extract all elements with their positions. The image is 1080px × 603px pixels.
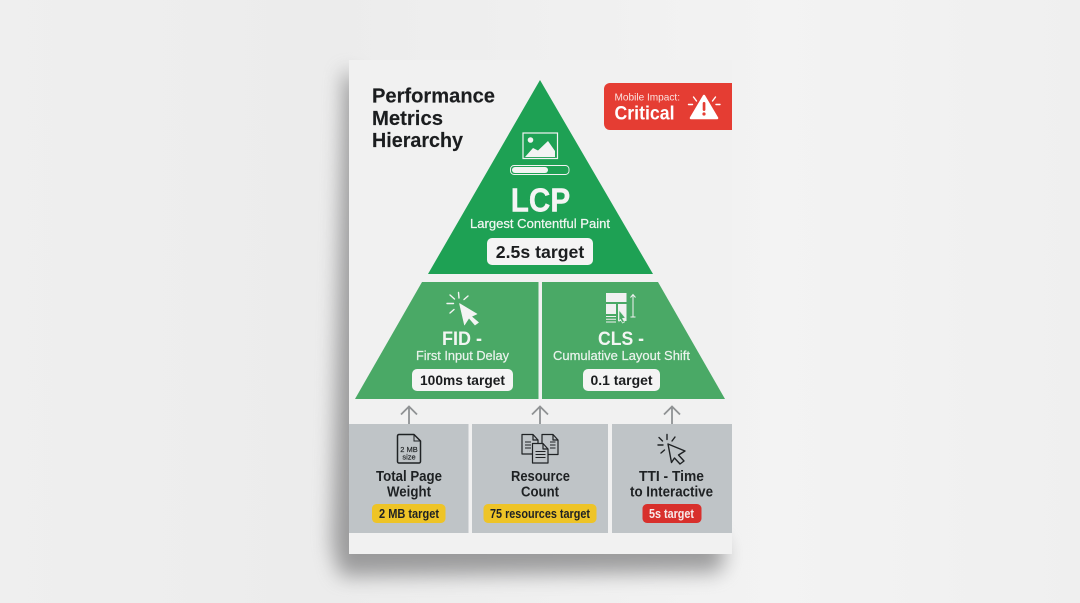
- title: Hierarchy: [372, 129, 464, 152]
- icon: layout shift: [606, 293, 636, 323]
- label: TTI: [630, 469, 713, 500]
- arrow: page weight to FID: [401, 406, 417, 424]
- label: Largest Contentful Paint: Largest Contentful Paint: [470, 217, 611, 231]
- label: Resource Count: Resource: [511, 469, 570, 485]
- callout: mobile impact critical: Mobile Impact:: [614, 92, 680, 104]
- icon: stacked documents: [522, 434, 558, 463]
- arrow: TTI to CLS: [664, 406, 680, 424]
- title: Performance: [372, 84, 495, 108]
- icon: image with progress bar: [510, 133, 569, 174]
- callout: mobile impact critical: Critical: [614, 103, 674, 124]
- panel: Resource Count: [472, 424, 608, 533]
- panel: FID: [355, 282, 538, 399]
- title: Metrics: [372, 107, 443, 130]
- panel: TTI: [612, 424, 732, 533]
- badge: 100ms target: [412, 369, 513, 391]
- panel: Total Page Weight: [349, 424, 468, 533]
- label: TTI: TTI - Time: [639, 469, 704, 485]
- badge: 2.5s target: 2.5s target: [496, 242, 584, 262]
- title: [372, 84, 495, 152]
- label: Cumulative Layout Shift: Cumulative Layout Shift: [553, 349, 691, 363]
- label: Total Page Weight: Weight: [387, 484, 431, 500]
- panel: CLS: [542, 282, 725, 399]
- label: CLS: CLS -: [598, 328, 644, 350]
- badge: 0.1 target: [583, 369, 660, 391]
- icon: click cursor: [447, 292, 478, 325]
- icon: document 2 MB size: [398, 434, 420, 463]
- label: Total Page Weight: Total Page: [376, 469, 442, 485]
- badge: 2.5s target: [487, 238, 593, 265]
- panel: LCP pyramid top: [428, 80, 653, 274]
- label: TTI: to Interactive: [630, 484, 713, 500]
- page sheet: [349, 60, 732, 554]
- badge: 5s target: 5s target: [649, 507, 695, 521]
- label: FID: FID -: [442, 328, 482, 350]
- badge: 100ms target: 100ms target: [420, 372, 505, 388]
- label: Resource Count: [511, 469, 570, 500]
- label: Total Page Weight: [376, 469, 442, 500]
- badge: 75 resources target: 75 resources target: [490, 507, 591, 521]
- callout: mobile impact critical: [604, 83, 732, 130]
- label: First Input Delay: First Input Delay: [416, 349, 510, 363]
- icon: warning triangle: [688, 96, 720, 118]
- arrow: resource count to pyramid: [532, 406, 548, 424]
- badge: 0.1 target: 0.1 target: [590, 372, 653, 388]
- icon: document 2 MB size: 2 MB: [400, 445, 418, 454]
- label: LCP: LCP: [511, 182, 570, 218]
- icon: click cursor outline: [658, 434, 685, 464]
- badge: 2 MB target: 2 MB target: [379, 507, 440, 521]
- label: Resource Count: Count: [521, 484, 559, 500]
- icon: document 2 MB size: size: [402, 452, 416, 462]
